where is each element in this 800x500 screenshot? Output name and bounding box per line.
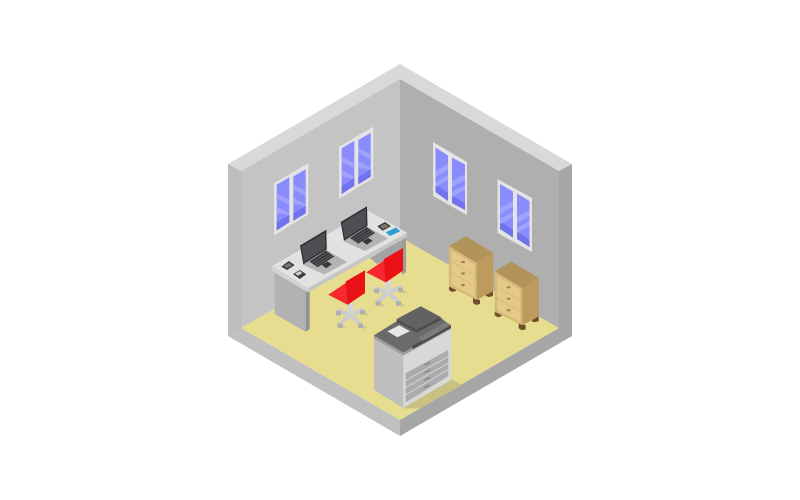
copier scanner lid [397, 306, 441, 332]
room shell [228, 64, 572, 436]
window: left wall, far [339, 127, 373, 199]
window: right wall, far [433, 142, 467, 215]
laptop: rear [341, 206, 388, 251]
top rim of walls [228, 64, 572, 171]
left wall end face [228, 164, 241, 336]
chair base [374, 281, 408, 307]
floor [241, 237, 559, 420]
right wall end face [559, 164, 572, 336]
chair base [336, 303, 370, 330]
chair back [346, 270, 365, 305]
window: right wall, near [498, 179, 532, 252]
copier shadow [403, 378, 462, 408]
copier output tray [412, 322, 451, 349]
phone [293, 270, 306, 279]
calculator: rear [377, 222, 391, 231]
cabinet: near [495, 262, 539, 330]
copier right face [403, 329, 451, 408]
cabinet: far [449, 236, 493, 305]
right wall [400, 79, 559, 329]
desk [272, 211, 407, 332]
chair: near [328, 270, 370, 330]
chair seat [366, 261, 400, 282]
chair: far [366, 248, 408, 307]
cabinet feet [449, 285, 493, 305]
chair seat [328, 283, 362, 305]
left wall [241, 79, 400, 329]
window: left wall, near [274, 163, 308, 236]
cabinet feet [495, 310, 539, 330]
floor slab left edge [228, 328, 400, 436]
tablet [384, 227, 402, 237]
chair back [384, 248, 403, 282]
floor slab right edge [400, 328, 572, 436]
copier left face [374, 338, 403, 408]
paper sheet [387, 325, 410, 337]
copier drawers [406, 350, 448, 402]
laptop: front [300, 230, 347, 274]
calculator: front [281, 261, 295, 270]
copier [374, 306, 462, 408]
copier top [374, 317, 451, 356]
